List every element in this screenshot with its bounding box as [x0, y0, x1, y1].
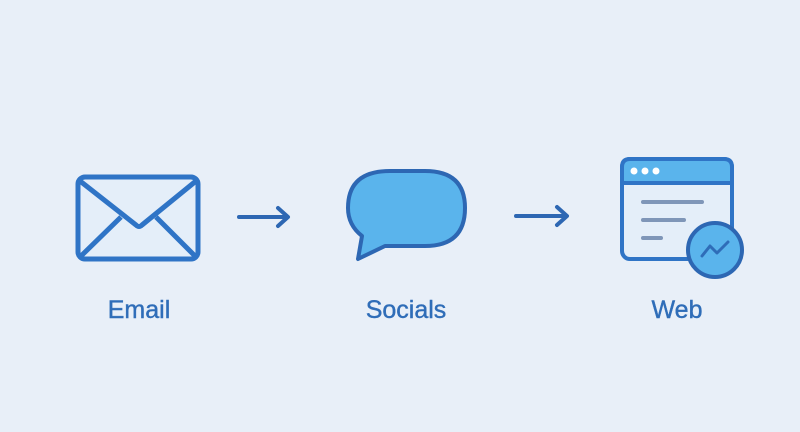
- label: Web: Web: [652, 296, 702, 324]
- icon: speech bubble: [348, 171, 465, 259]
- arrow: email to socials: [239, 208, 288, 226]
- icon: browser with chart badge: [622, 159, 742, 277]
- arrow: socials to web: [516, 207, 567, 225]
- icon: envelope: [78, 177, 198, 259]
- label: Email: Email: [108, 296, 170, 324]
- label: Socials: Socials: [366, 296, 446, 324]
